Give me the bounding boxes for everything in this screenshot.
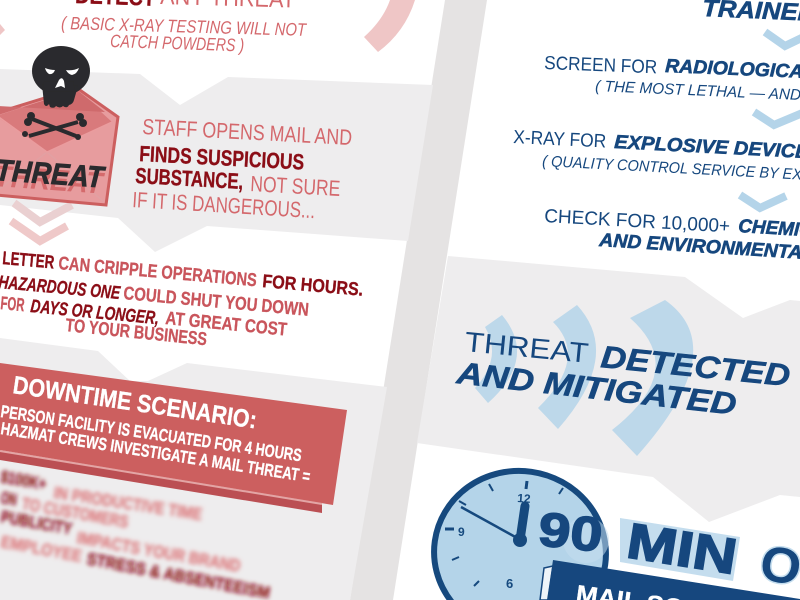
text: screen for radiological: SCREEN FOR (544, 53, 658, 78)
text: basic x-ray note: CATCH POWDERS ) (110, 31, 244, 55)
text: letter can cripple operations: FOR (0, 292, 26, 315)
text: downtime description: PERSON FACILITY IS EVACUATED FOR 4 HOURS (0, 401, 303, 465)
text: letter can cripple operations: DAYS OR LONGER, (30, 295, 160, 328)
icon: chevrons below envelope (11, 203, 72, 241)
text: blurred cost list: ON (0, 488, 18, 510)
panel: left grey band with downtime scenario (0, 338, 387, 600)
heading: threat detected and mitigated: AND MITIGATED (454, 355, 738, 422)
icon: blue signal arcs (475, 300, 693, 456)
text: letter can cripple operations: LETTER (2, 247, 55, 273)
icon: clock (423, 460, 617, 600)
text: blurred cost list: TO CUSTOMERS (20, 494, 130, 532)
heading: downtime scenario: DOWNTIME SCENARIO: (11, 371, 259, 434)
text: screen for radiological: ( THE MOST LETHAL — AND (595, 78, 800, 104)
text: blurred cost list: IN PRODUCTIVE TIME (52, 483, 204, 524)
icon: pink signal arc top (364, 0, 415, 52)
text: letter can cripple operations: FOR HOURS. (262, 270, 364, 300)
text: blurred cost list: PUBLICITY (0, 507, 74, 539)
text: blurred cost list: EMPLOYEE (0, 532, 83, 566)
text: blurred cost list: IMPACTS YOUR BRAND (75, 528, 242, 576)
text: basic x-ray note (61, 13, 308, 55)
panel: mail sorting banner (540, 560, 800, 600)
text: letter can cripple operations: HAZARDOUS ONE (0, 271, 122, 303)
icon: skull and crossbones (22, 46, 90, 140)
text: basic x-ray note: ( BASIC X-RAY TESTING WILL NOT (61, 13, 308, 40)
heading: threat detected and mitigated (454, 326, 792, 422)
text: letter can cripple operations: TO YOUR BUSINESS (65, 314, 208, 349)
text: letter can cripple operations: AT GREAT COST (165, 307, 289, 340)
text: blurred cost list (0, 467, 272, 600)
heading: threat detected and mitigated: DETECTED (599, 339, 792, 393)
icon: clock: 9 (458, 525, 465, 539)
text: staff opens mail: NOT SURE (250, 171, 341, 201)
text: check for chemicals (544, 206, 800, 264)
text: letter can cripple operations: COULD SHUT YOU DOWN (123, 282, 310, 320)
heading: threat detected and mitigated: THREAT (463, 326, 590, 369)
panel: right grey band with detected heading (417, 256, 800, 522)
text: blurred cost list: $100K+ (0, 467, 48, 494)
text: screen for radiological (544, 53, 800, 104)
icon: envelope (0, 88, 118, 205)
heading: 90 min (536, 503, 800, 600)
text: staff opens mail: STAFF OPENS MAIL AND (142, 114, 353, 150)
icon: pink signal arc left (0, 24, 5, 35)
icon: blue chevrons (740, 32, 800, 208)
text: staff opens mail: FINDS SUSPICIOUS (139, 141, 305, 175)
text: letter can cripple operations (0, 247, 364, 349)
text: x-ray for explosive devices: X-RAY FOR (513, 127, 607, 153)
text: staff opens mail: SUBSTANCE, (135, 163, 244, 194)
icon: clock: 6 (506, 576, 513, 591)
panel: left grey band with envelope (0, 69, 433, 252)
heading: detect any threat (75, 0, 296, 14)
text: staff opens mail: IF IT IS DANGEROUS... (132, 187, 316, 223)
page gutter between panels (350, 0, 487, 600)
text: staff opens mail (132, 114, 353, 223)
heading: 90 min: 90 (536, 503, 605, 563)
text: x-ray for explosive devices (513, 127, 800, 184)
icon: clock: 12 (517, 491, 531, 506)
text: check for chemicals: CHECK FOR 10,000+ (544, 206, 731, 237)
text: downtime description: HAZMAT CREWS INVESTIGATE A MAIL THREAT = (0, 418, 312, 486)
heading: 90 min: MIN (623, 513, 741, 585)
text: letter can cripple operations: CAN CRIPPLE OPERATIONS (58, 252, 258, 290)
panel: downtime scenario ribbon (0, 363, 347, 513)
